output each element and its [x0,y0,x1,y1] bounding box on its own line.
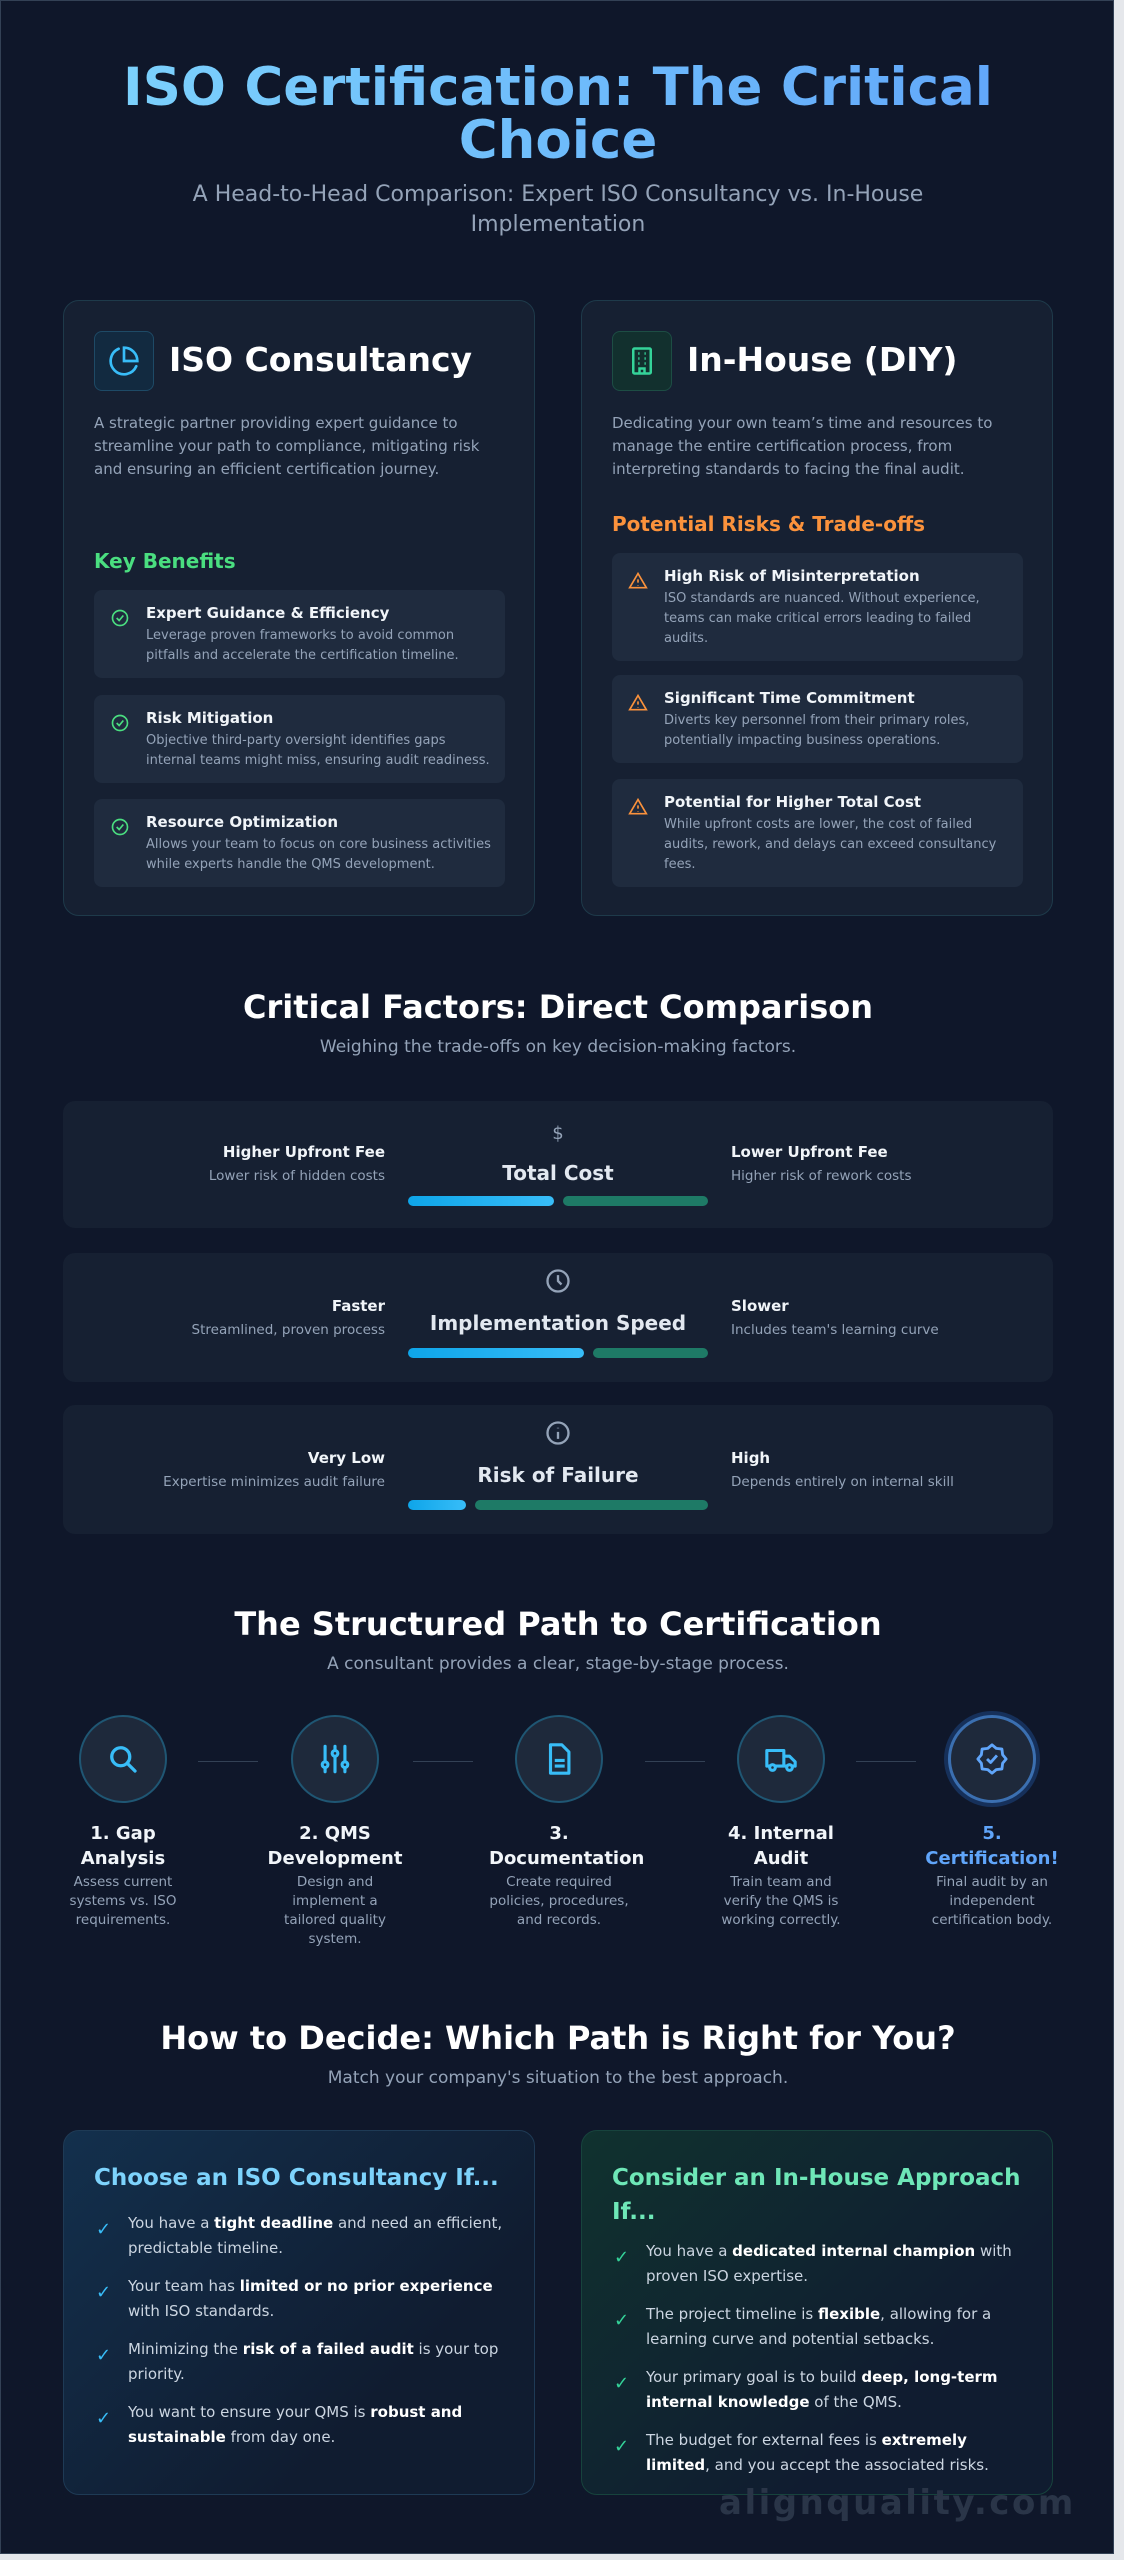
checklist: The budget for external fees is extremely limited, and you accept the associated risks. [646,2431,989,2474]
benefit 1: Leverage proven frameworks to avoid common pitfalls and accelerate the certification timeline. [146,628,459,663]
factor row: Risk: Expertise minimizes audit failure [163,1474,385,1490]
risk 2: Significant Time Commitment [664,689,915,707]
step 2: 2. QMS Development [268,1823,402,1869]
panel: In-House [581,300,1053,916]
risk 3: Potential for Higher Total Cost [664,793,921,811]
heading: How to Decide: How to Decide: Which Path is Right for You? [160,2019,956,2057]
subheading: Weighing the trade-offs on key decision-making factors. [320,1037,796,1057]
step 5: 5. Certification! [925,1823,1059,1869]
risk 1: High Risk of Misinterpretation [664,567,920,585]
risk 1: ISO standards are nuanced. Without experience, teams can make critical errors leading to failed audits. [664,591,980,646]
step 5: Final audit by an independent certification body. [932,1874,1052,1928]
factor row: Risk: High [731,1449,770,1467]
subheading: A consultant provides a clear, stage-by-stage process. [327,1654,789,1674]
checklist [614,2242,1012,2474]
step 4: 4. Internal Audit [728,1823,834,1869]
heading: Structured Path: The Structured Path to Certification [234,1605,882,1643]
step 1: Assess current systems vs. ISO requirements. [70,1874,176,1928]
icon: pie chart [94,331,154,391]
icon: building [612,331,672,391]
factor row: Speed [63,1253,1053,1382]
step 1 [70,1715,176,1928]
checklist: ✓ [96,2408,111,2429]
factor row: Total Cost: Higher Upfront Fee [223,1143,385,1161]
description: Dedicating your own team’s time and resources to manage the entire certification process, from interpreting standards to facing the final audit. [612,414,992,478]
panel: ISO Consultancy [63,300,535,916]
risk 3: While upfront costs are lower, the cost of failed audits, rework, and delays can exceed consultancy fees. [664,817,996,872]
checklist: ✓ [96,2345,111,2366]
step 3: Create required policies, procedures, and records. [489,1874,629,1928]
step 4: Train team and verify the QMS is working correctly. [721,1874,841,1928]
heading: Consider an In-House Approach If... [612,2165,1021,2225]
icon: badge check [948,1715,1036,1803]
watermark: alignquality.com [719,2483,1076,2523]
icon: search [79,1715,167,1803]
checklist: Your team has limited or no prior experience with ISO standards. [128,2277,493,2320]
factor row: Total Cost: Higher risk of rework costs [731,1168,911,1184]
risk 3 [612,779,1023,887]
checklist [96,2214,502,2446]
checklist: Your primary goal is to build deep, long-term internal knowledge of the QMS. [646,2368,998,2411]
icon: sliders [291,1715,379,1803]
checklist: ✓ [614,2373,629,2394]
benefit 3 [94,799,505,887]
step 5 [925,1711,1059,1928]
description: A strategic partner providing expert guidance to streamline your path to compliance, mitigating risk and ensuring an efficient certification journey. [94,414,479,478]
factor row: Total Cost: Lower Upfront Fee [731,1143,888,1161]
benefit 2: Objective third-party oversight identifies gaps internal teams might miss, ensuring audit readiness. [146,733,490,768]
risk 2 [612,675,1023,763]
icon: dollar: $ [552,1123,564,1144]
factor row: Risk [63,1405,1053,1534]
subheading: Key Benefits: Key Benefits [94,549,236,573]
benefit 1 [94,590,505,678]
factor row: Speed: Faster [332,1297,385,1315]
factor row: Total Cost [63,1101,1053,1228]
factor row: Speed: Includes team's learning curve [731,1322,939,1338]
factor row: Total Cost: Total Cost [502,1161,614,1185]
checklist: ✓ [614,2310,629,2331]
checklist: ✓ [96,2219,111,2240]
icon: clock [546,1269,570,1293]
checklist: You want to ensure your QMS is robust and sustainable from day one. [128,2403,462,2446]
panel: Choose consultancy [63,2130,535,2495]
title: ISO Certification: The Critical Choice [123,57,993,171]
step 3 [489,1715,644,1928]
factor row: Risk: Risk of Failure [477,1463,639,1487]
panel: Consider in-house [581,2130,1053,2495]
factor row: Total Cost: Lower risk of hidden costs [209,1168,385,1184]
benefit 3: Allows your team to focus on core business activities while experts handle the QMS development. [146,837,491,872]
factor row: Speed: Implementation Speed [430,1311,686,1335]
subheading: risks: Potential Risks & Trade-offs [612,512,925,536]
heading: In-House (DIY) [687,340,958,379]
risk 1 [612,553,1023,661]
subheading: Match your company's situation to the best approach. [328,2068,788,2088]
factor row: Risk: Very Low [308,1449,385,1467]
benefit 3: Resource Optimization [146,813,338,831]
checklist: ✓ [96,2282,111,2303]
checklist: The project timeline is flexible, allowing for a learning curve and potential setbacks. [646,2305,991,2348]
step 3: 3. Documentation [489,1823,644,1869]
benefit 2: Risk Mitigation [146,709,273,727]
heading: Critical Factors: Critical Factors: Direct Comparison [243,988,873,1026]
factor row: Speed: Streamlined, proven process [192,1322,385,1338]
subtitle: A Head-to-Head Comparison: Expert ISO Consultancy vs. In-House Implementation [193,182,923,237]
step 1: 1. Gap Analysis [81,1823,165,1869]
factor row: Speed: Slower [731,1297,789,1315]
step 2: Design and implement a tailored quality system. [284,1874,386,1947]
checklist: ✓ [614,2436,629,2457]
risk 2: Diverts key personnel from their primary roles, potentially impacting business operations. [664,713,969,748]
icon: info [546,1421,570,1445]
factor row: Risk: Depends entirely on internal skill [731,1474,954,1490]
icon: truck [737,1715,825,1803]
heading: ISO Consultancy [169,340,472,379]
icon: document [515,1715,603,1803]
checklist: You have a dedicated internal champion with proven ISO expertise. [646,2242,1012,2285]
step 2 [268,1715,402,1947]
checklist: Minimizing the risk of a failed audit is your top priority. [128,2340,498,2383]
checklist: ✓ [614,2247,629,2268]
benefit 2 [94,695,505,783]
connectors [198,1761,258,1762]
benefit 1: Expert Guidance & Efficiency [146,604,389,622]
step 4 [721,1715,841,1928]
checklist: You have a tight deadline and need an efficient, predictable timeline. [128,2214,502,2257]
heading: Choose an ISO Consultancy If... [94,2165,499,2191]
